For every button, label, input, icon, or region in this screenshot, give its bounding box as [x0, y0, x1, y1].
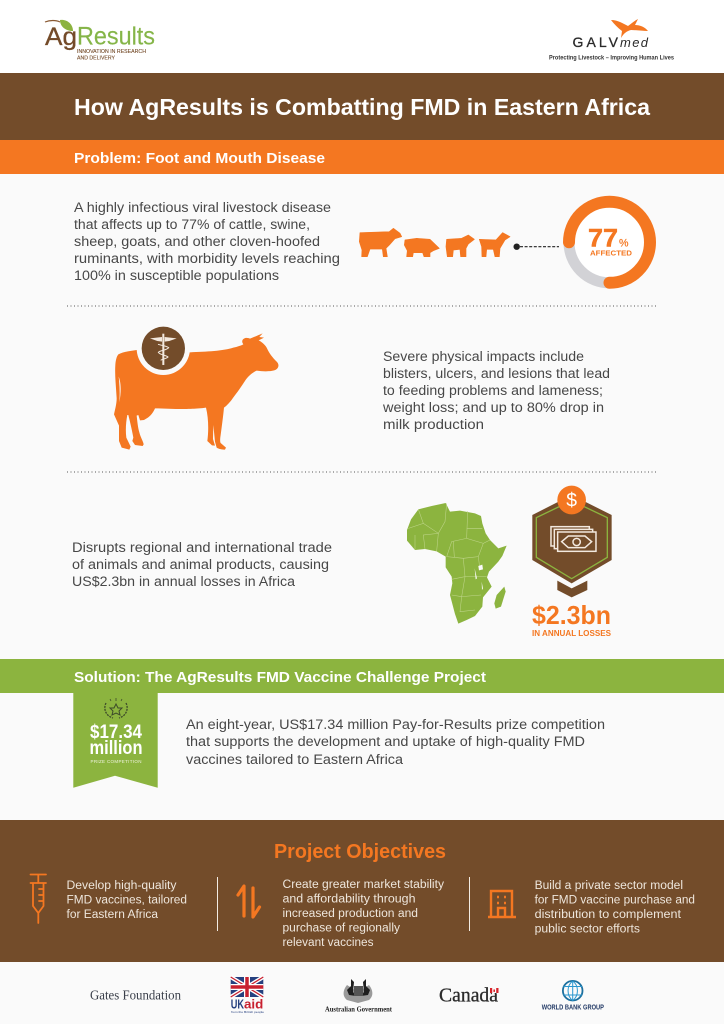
title banner	[0, 73, 724, 140]
icon: syringe	[30, 874, 46, 923]
text: trade disruption: Disrupts regional and international trade	[72, 540, 332, 555]
icon: up and down arrows	[238, 886, 260, 917]
logo: AgResults: AND DELIVERY	[77, 56, 115, 62]
text: disease description: ruminants, with morbidity levels reaching	[74, 251, 340, 266]
text: disease description	[74, 200, 340, 283]
stat: annual losses: $2.3bn	[532, 600, 611, 630]
objective: develop vaccines: Develop high-quality	[66, 880, 177, 892]
logo: AgResults	[45, 20, 155, 62]
text: physical impacts: milk production	[383, 417, 484, 432]
objective: private sector model: Build a private sector model	[535, 880, 683, 892]
text: solution description	[186, 717, 605, 767]
logo: UK aid	[231, 977, 264, 1014]
chart: 77% donut	[569, 202, 650, 283]
logo: Australian Government	[325, 979, 392, 1014]
objective: market stability: Create greater market stability	[282, 879, 444, 891]
text: solution description: that supports the development and uptake of high-quality FMD	[186, 734, 585, 749]
objective: market stability	[282, 879, 444, 949]
text: solution description: vaccines tailored to Eastern Africa	[186, 752, 404, 767]
ribbon: prize amount: PRIZE COMPETITION	[90, 759, 142, 764]
text: physical impacts: Severe physical impacts include	[383, 349, 584, 364]
logo: AgResults: Results	[77, 22, 155, 50]
logo: World Bank Group: WORLD BANK GROUP	[542, 1002, 604, 1011]
stat: annual losses: IN ANNUAL LOSSES	[532, 628, 611, 638]
objective: market stability: purchase of regionally	[282, 922, 400, 934]
text: trade disruption: of animals and animal products, causing	[72, 557, 329, 572]
text: trade disruption	[72, 540, 332, 589]
text: disease description: A highly infectious viral livestock disease	[74, 200, 331, 215]
logo: GALVmed: med	[620, 35, 649, 50]
text: solution description: An eight-year, US$17.34 million Pay-for-Results prize competition	[186, 717, 605, 732]
ribbon: prize amount	[73, 693, 158, 788]
logo: GALVmed: GALV	[572, 34, 619, 50]
logo: AgResults: INNOVATION IN RESEARCH	[77, 49, 146, 55]
logo: Gates Foundation: Gates Foundation	[90, 988, 181, 1003]
icon: money hexagon badge: $	[566, 491, 577, 512]
chart: 77% donut: %	[619, 238, 629, 250]
text: physical impacts: to feeding problems and lameness;	[383, 383, 603, 398]
icon: building	[488, 891, 516, 917]
logo: UK aid: aid	[244, 998, 263, 1012]
text: disease description: sheep, goats, and other cloven-hoofed	[74, 234, 320, 249]
logo: World Bank Group	[542, 981, 604, 1011]
text: physical impacts	[382, 349, 610, 432]
text: disease description: that affects up to 77% of cattle, swine,	[74, 217, 310, 232]
connector: dashed line	[514, 244, 559, 250]
logo: GALVmed	[549, 19, 674, 62]
objective: private sector model: distribution to complement	[535, 909, 682, 921]
chart: 77% donut: AFFECTED	[590, 248, 633, 257]
text: trade disruption: US$2.3bn in annual losses in Africa	[72, 574, 296, 589]
map: Africa	[407, 503, 507, 624]
heading: problem: Problem: Foot and Mouth Disease	[74, 150, 325, 167]
objective: market stability: increased production and	[282, 908, 418, 920]
heading: solution: Solution: The AgResults FMD Vaccine Challenge Project	[74, 669, 486, 686]
objective: private sector model: for FMD vaccine purchase and	[535, 894, 695, 906]
text: disease description: 100% in susceptible populations	[74, 268, 279, 283]
objective: develop vaccines: FMD vaccines, tailored	[66, 894, 187, 906]
ribbon: prize amount: million	[90, 738, 142, 759]
objective: market stability: relevant vaccines	[282, 937, 374, 949]
objective: develop vaccines: for Eastern Africa	[66, 909, 159, 921]
logo: Canada: Canada	[439, 985, 498, 1007]
ribbon: prize amount: $17.34	[90, 722, 142, 743]
objective: private sector model: public sector efforts	[535, 924, 640, 936]
panel: project objectives	[0, 820, 724, 962]
objective: private sector model	[535, 880, 695, 936]
logo: Australian Government: Australian Government	[325, 1005, 392, 1014]
text: physical impacts: blisters, ulcers, and lesions that lead	[383, 366, 610, 381]
logo: GALVmed: Protecting Livestock – Improving Human Lives	[549, 54, 674, 62]
title banner: How AgResults is Combatting FMD in Eastern Africa	[74, 94, 650, 120]
logo: UK aid: UK	[231, 998, 244, 1012]
illustration: cow with medical badge	[114, 322, 278, 450]
icons: livestock silhouettes	[359, 228, 510, 257]
objective: market stability: and affordability through	[282, 894, 416, 906]
objective: develop vaccines	[66, 880, 187, 921]
icon: money hexagon badge	[532, 486, 612, 597]
heading: solution	[0, 659, 724, 693]
chart: 77% donut: 77	[588, 225, 618, 253]
heading: project objectives: Project Objectives	[274, 841, 446, 863]
heading: problem	[0, 140, 724, 174]
logo: UK aid: from the British people	[231, 1010, 264, 1014]
logo: AgResults: Ag	[45, 23, 77, 51]
text: physical impacts: weight loss; and up to 80% drop in	[382, 400, 604, 415]
